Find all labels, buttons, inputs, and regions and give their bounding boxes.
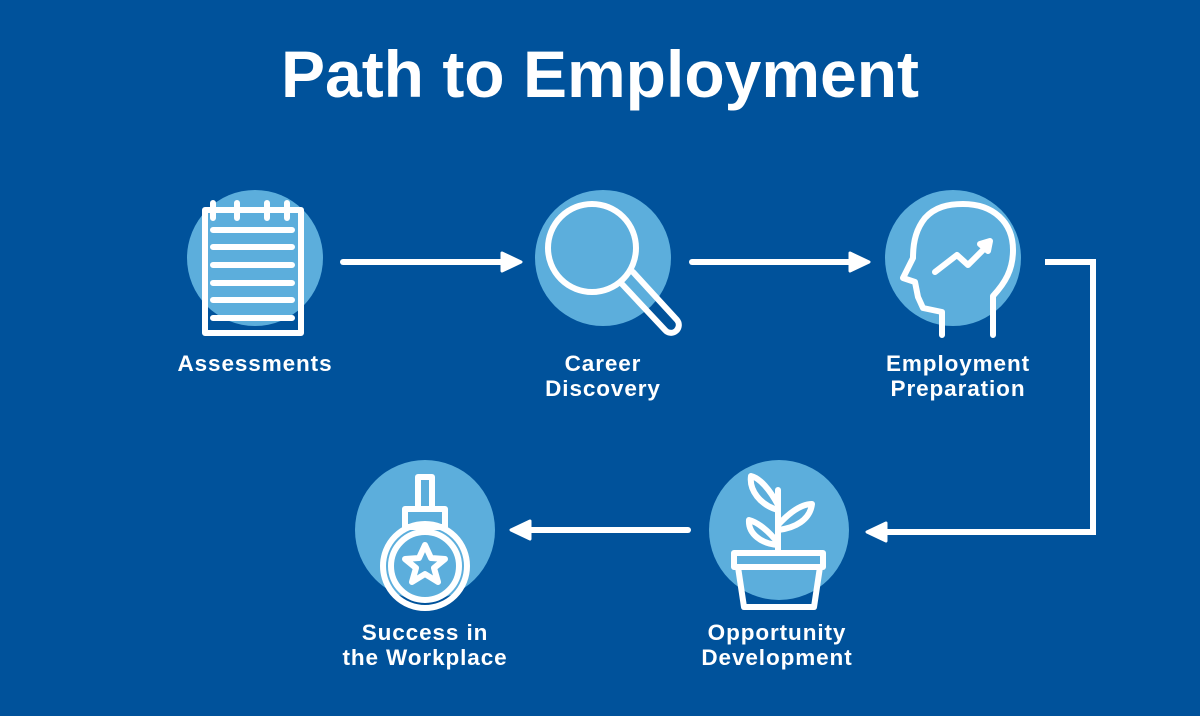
- icon: medal: [355, 460, 495, 608]
- label: opportunity: [701, 620, 853, 670]
- label: success: [342, 620, 508, 670]
- icon: magnifier: [535, 190, 679, 333]
- icon: plant: [709, 460, 849, 607]
- label: success: the Workplace: [342, 645, 508, 670]
- label: career discovery: Discovery: [545, 376, 661, 401]
- arrow 4: [511, 521, 688, 539]
- label: assessments: Assessments: [178, 351, 332, 376]
- arrow 2: [692, 253, 869, 271]
- label: career discovery: [545, 351, 661, 401]
- label: success: Success in: [362, 620, 488, 645]
- arrow 1: [343, 253, 521, 271]
- label: employment preparation: [886, 351, 1030, 401]
- icon: head: [885, 190, 1021, 335]
- icon: notepad: [187, 190, 323, 333]
- label: employment preparation: Employment: [886, 351, 1030, 376]
- label: opportunity: Opportunity: [708, 620, 846, 645]
- title: Path to Employment: [281, 37, 919, 111]
- label: career discovery: Career: [565, 351, 641, 376]
- label: opportunity: Development: [701, 645, 853, 670]
- label: employment preparation: Preparation: [891, 376, 1025, 401]
- arrow 3: [867, 262, 1093, 541]
